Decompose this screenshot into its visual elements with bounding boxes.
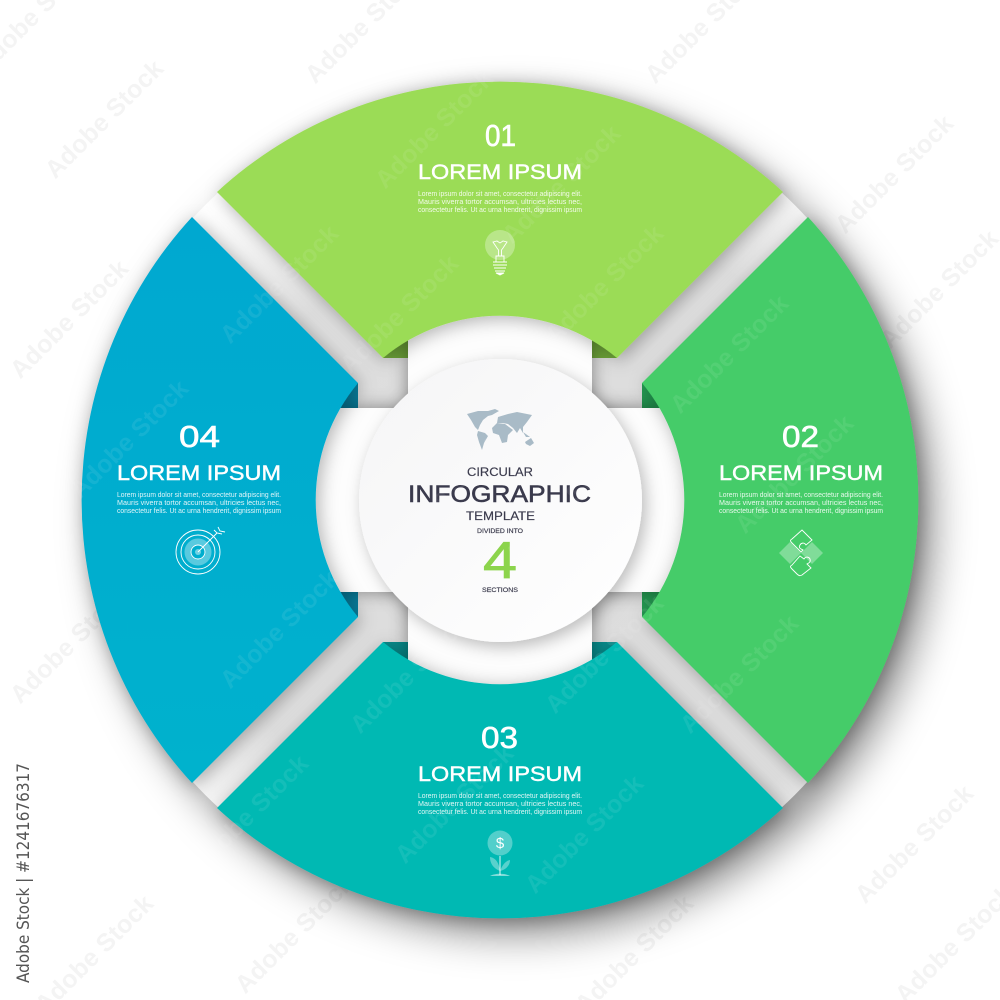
segment 03 text: LOREM IPSUM [418,762,582,786]
watermark text: Adobe Stock [730,410,859,539]
segment 02 text: Lorem ipsum dolor sit amet, consectetur adipiscing elit. [719,490,883,499]
segment 01 text: 01 [485,118,516,153]
watermark text: Adobe Stock [370,65,499,194]
adobe stock id label: Adobe Stock | #1241676317 [14,763,34,983]
icon: target with arrow [176,527,225,574]
segment 03 text: 03 [481,720,518,755]
segment 04 text: LOREM IPSUM [117,461,281,485]
segment 02 text [719,419,883,515]
segment 03 text: consectetur felis. Ut ac urna hendrerit, dignissim ipsum [418,807,582,816]
segment 02 text: Mauris viverra tortor accumsan, ultricies lectus nec, [719,498,883,507]
segment 03 text [418,720,582,816]
segment 01 shape [217,82,783,358]
segment 03 text: Lorem ipsum dolor sit amet, consectetur adipiscing elit. [418,791,582,800]
watermark text: Adobe Stock [185,750,314,879]
icon: world map [467,409,534,450]
watermark text on white background: Adobe Stock [40,55,169,184]
icon: puzzle pieces [779,530,823,576]
center title text: TEMPLATE [466,511,535,523]
center title text: SECTIONS [482,587,518,594]
segment 04 shape [82,217,358,783]
watermark text: Adobe Stock [500,440,629,569]
segment 02 text: consectetur felis. Ut ac urna hendrerit, dignissim ipsum [719,506,883,515]
segment 04 text: Mauris viverra tortor accumsan, ultricies lectus nec, [117,498,281,507]
watermark text on white background: Adobe Stock [5,255,134,384]
icon: money plant: $ [496,835,505,852]
segment 03 shape [217,642,783,918]
center title text [408,467,591,594]
watermark text: Adobe Stock [390,740,519,869]
segment 01 text: Mauris viverra tortor accumsan, ultricies lectus nec, [418,197,582,206]
segment 01 text: consectetur felis. Ut ac urna hendrerit, dignissim ipsum [418,205,582,214]
icon: money plant [488,830,512,876]
watermark text on white background: Adobe Stock [5,580,134,709]
segment 02 shape [642,217,918,783]
white cross behind center circle [316,316,684,684]
watermark text [65,65,859,899]
watermark text: Adobe Stock [380,430,509,559]
segment 04 text [117,419,281,515]
segment 04 text: Lorem ipsum dolor sit amet, consectetur adipiscing elit. [117,490,281,499]
segment 01 text [418,118,582,214]
center circle [359,359,642,642]
segment 03 text: Mauris viverra tortor accumsan, ultricies lectus nec, [418,799,582,808]
big number 4: 4 [483,532,517,590]
segment 02 text: LOREM IPSUM [719,461,883,485]
watermark text on white background: Adobe Stock [230,870,359,999]
watermark text: Adobe Stock [335,250,464,379]
watermark text: Adobe Stock [540,220,669,349]
watermark text: Adobe Stock [675,610,804,739]
center title text: CIRCULAR [467,467,533,479]
watermark text: Adobe Stock [520,770,649,899]
watermark text: Adobe Stock [665,290,794,419]
grey gaps between segments [83,83,917,917]
segment 02 text: 02 [782,419,819,454]
watermark text: Adobe Stock [215,220,344,349]
segment 01 text: LOREM IPSUM [418,160,582,184]
darker inner segment layer [338,338,662,662]
watermark text: Adobe Stock [215,565,344,694]
segment 04 text: 04 [179,419,220,454]
watermark text: Adobe Stock [540,590,669,719]
segment 04 text: consectetur felis. Ut ac urna hendrerit, dignissim ipsum [117,506,281,515]
segment 01 text: Lorem ipsum dolor sit amet, consectetur adipiscing elit. [418,189,582,198]
center title text: DIVIDED INTO [477,528,523,535]
watermark text on white background: Adobe Stock [830,110,959,239]
outer drop shadow of the ring [98,100,934,936]
watermark text: Adobe Stock [497,120,626,249]
watermark text on white background: Adobe Stock [850,780,979,909]
watermark text: Adobe Stock [345,610,474,739]
watermark text: Adobe Stock [65,375,194,504]
center title text: INFOGRAPHIC [408,481,591,508]
icon: light bulb [485,230,515,275]
